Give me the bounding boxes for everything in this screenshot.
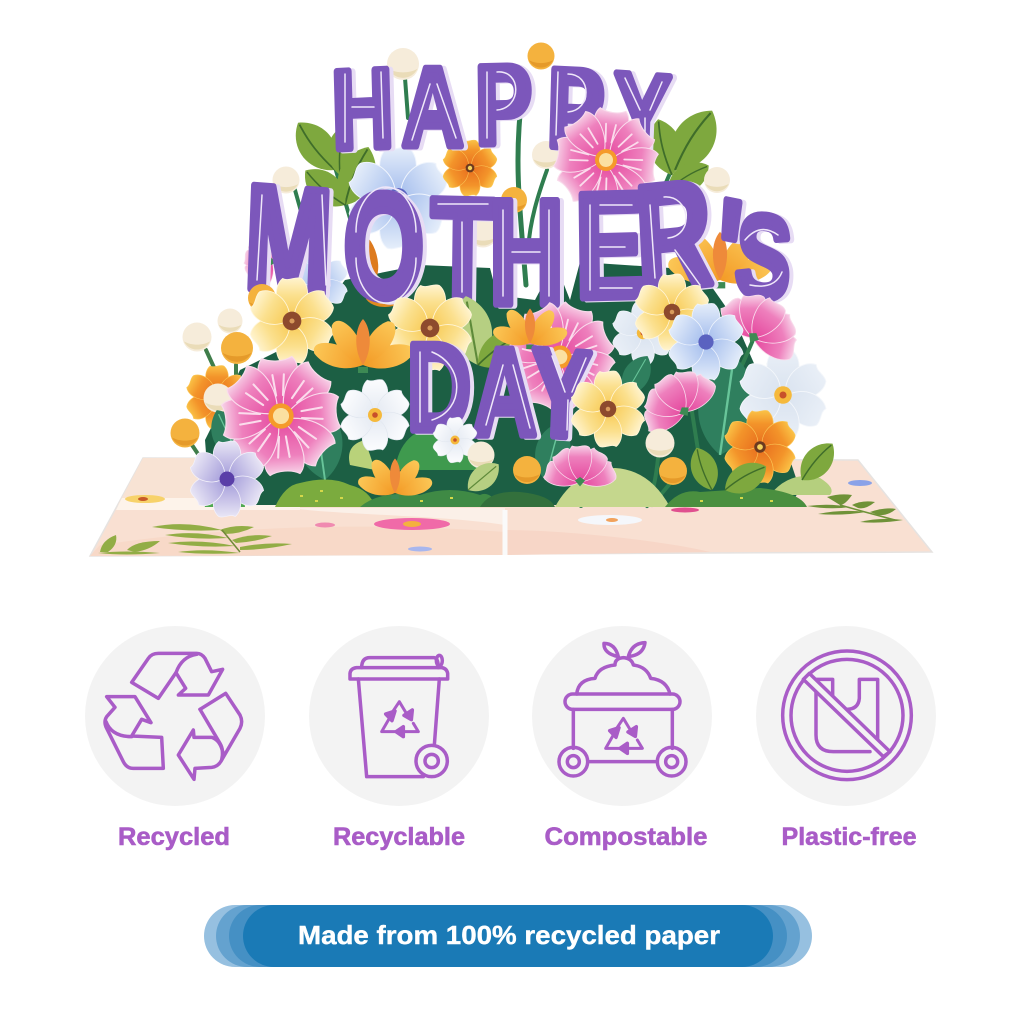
banner text: Made from 100% recycled paper: [298, 920, 720, 950]
icon: crossed-out plastic bag: [783, 651, 911, 780]
heading word: MOTHER'S: MOTHER'S: [242, 149, 795, 338]
leaf sprig top right: [642, 100, 729, 202]
flower: large pink behind DAY: [491, 288, 629, 426]
icon: wheeled recycling bin: [350, 655, 448, 777]
printed leaves right: [807, 494, 903, 523]
label: Compostable: Compostable: [544, 823, 708, 851]
flower: white right: [736, 350, 830, 440]
ground bushes: [202, 465, 832, 507]
heading word: HAPPY: HAPPY: [330, 43, 672, 179]
badge: plastic-free: [756, 626, 936, 851]
flat flowers printed on card: [125, 480, 872, 552]
dark foliage mass behind flowers: [205, 262, 800, 505]
flower: blue right: [666, 303, 746, 381]
flower: small orange: [441, 140, 499, 196]
flower: white center: [338, 379, 412, 451]
flower: pink fan middle: [627, 355, 727, 446]
badge: recyclable: [309, 626, 489, 851]
center fold of card: [502, 510, 508, 555]
leaf sprig top left: [285, 112, 385, 216]
pop-up card base: [90, 458, 932, 556]
flowers in front of MOTHER'S: [247, 274, 712, 378]
stems: [192, 78, 753, 506]
label: Recycled: Recycled: [118, 823, 230, 851]
badge: recycled: [85, 626, 265, 851]
flower: pink top: [548, 102, 664, 218]
flower: yellow lower: [568, 371, 648, 447]
flower: blue behind O: [345, 147, 451, 249]
printed leaves left: [98, 524, 292, 554]
banner: made from 100% recycled paper: [204, 905, 812, 967]
flowers behind MOTHER'S: [240, 228, 775, 312]
label: Plastic-free: Plastic-free: [782, 823, 917, 851]
flower: orange tulip left: [311, 316, 416, 376]
foreground small flowers: [187, 410, 843, 517]
flower: pink fan right: [709, 277, 814, 374]
badge: compostable: [532, 626, 712, 851]
icon: compost cart: [559, 643, 686, 776]
heading word: DAY: DAY: [407, 318, 593, 465]
flower: pink large cosmos: [218, 353, 344, 479]
side flowers and buds: [170, 308, 785, 484]
icon: recycling arrows: [105, 653, 242, 779]
label: Recyclable: Recyclable: [333, 823, 465, 851]
flower: orange tulip above DAY: [491, 306, 569, 351]
small buds top: [272, 42, 730, 248]
